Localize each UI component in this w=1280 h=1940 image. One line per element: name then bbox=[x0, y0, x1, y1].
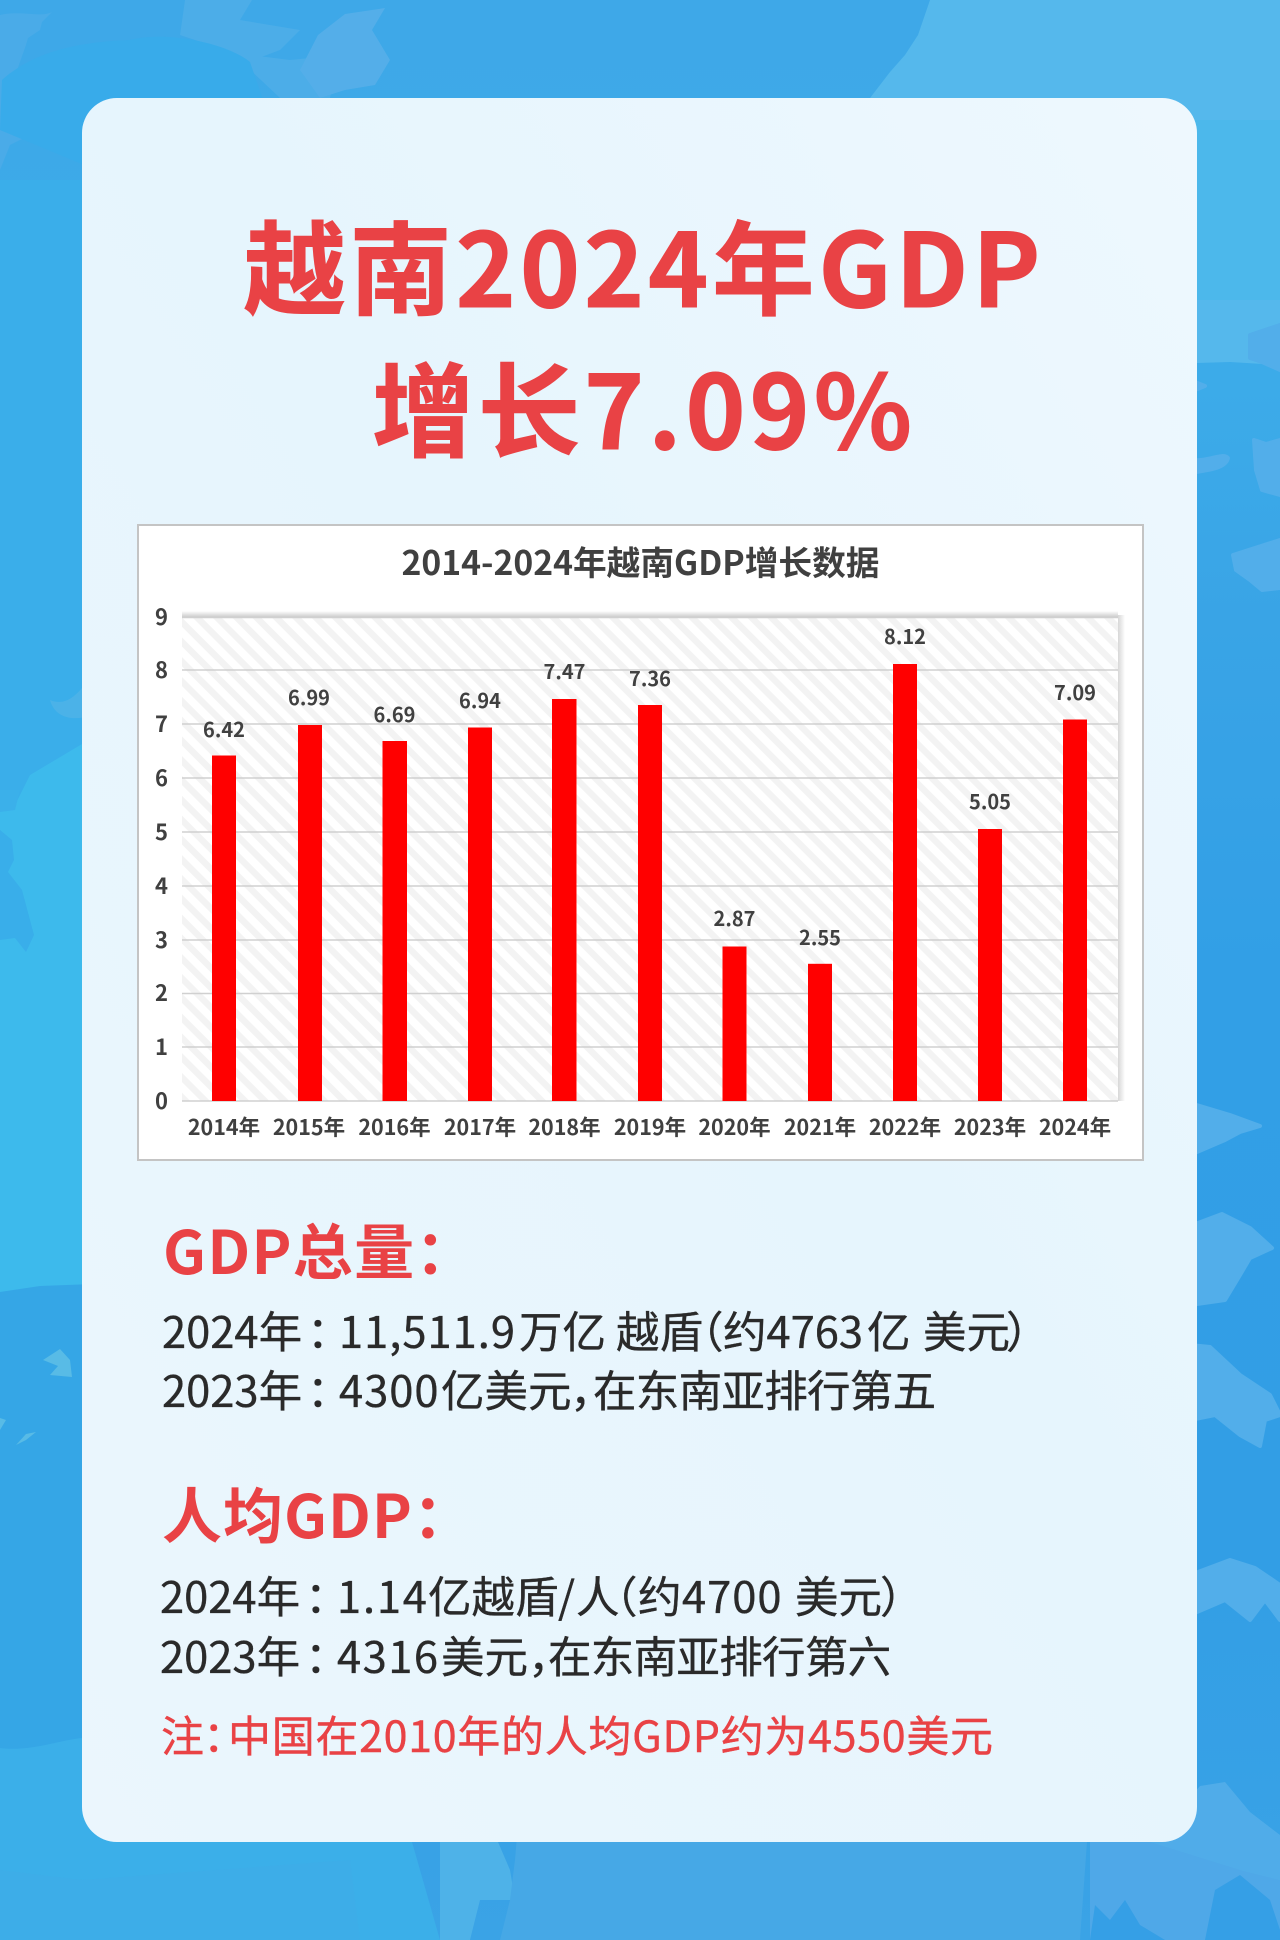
text block: GDP total: 美元 bbox=[923, 1298, 1010, 1361]
right column islands bbox=[1190, 325, 1280, 1620]
value labels bbox=[203, 621, 1096, 951]
title bbox=[244, 190, 1044, 479]
text block: GDP total: 2023年 bbox=[162, 1357, 302, 1420]
x axis labels bbox=[188, 1111, 1111, 1142]
bottom land bbox=[0, 1738, 440, 1940]
text block: GDP total: 11,511.9 bbox=[339, 1298, 516, 1361]
x axis labels: 2014年 bbox=[188, 1111, 260, 1142]
value labels: 6.94 bbox=[459, 685, 501, 714]
y axis labels: 4 bbox=[155, 869, 168, 901]
chart title: 2014-2024年越南GDP增长数据 bbox=[402, 536, 879, 585]
text block: GDP per capita: 人 bbox=[576, 1563, 620, 1626]
text block: GDP per capita: 在东南亚排行第六 bbox=[548, 1623, 890, 1686]
heading: GDP per capita: 人均GDP： bbox=[162, 1469, 474, 1556]
value labels: 6.69 bbox=[374, 699, 415, 728]
text block: GDP per capita: ： bbox=[305, 1623, 348, 1686]
title: 越南2024年GDP bbox=[244, 190, 1044, 337]
y axis labels: 7 bbox=[155, 707, 168, 739]
x axis labels: 2016年 bbox=[358, 1111, 431, 1142]
text block: GDP total: 亿美元 bbox=[441, 1357, 572, 1420]
text block: GDP total bbox=[162, 1298, 1050, 1420]
text block: GDP total: 4300 bbox=[339, 1357, 440, 1420]
text block: GDP total: ） bbox=[1006, 1298, 1050, 1361]
y axis labels: 8 bbox=[155, 653, 168, 685]
x axis labels: 2023年 bbox=[954, 1111, 1026, 1142]
x axis labels: 2021年 bbox=[784, 1111, 856, 1142]
value labels: 2.55 bbox=[799, 922, 841, 951]
panel: white card bbox=[82, 98, 1197, 1842]
text block: GDP total: ： bbox=[307, 1357, 350, 1420]
value labels: 5.05 bbox=[969, 786, 1011, 815]
text block: GDP per capita: / bbox=[558, 1563, 575, 1626]
chart: GDP growth bar chart 2014-2024 bbox=[138, 525, 1143, 1160]
y axis labels: 9 bbox=[155, 600, 168, 632]
note: 注 bbox=[161, 1703, 204, 1765]
text block: GDP total: 万亿 bbox=[519, 1298, 606, 1361]
plot area bbox=[182, 611, 1125, 1101]
title: 增长7.09% bbox=[372, 332, 916, 479]
value labels: 7.47 bbox=[544, 656, 585, 685]
value labels: 8.12 bbox=[884, 621, 926, 650]
y axis labels: 0 bbox=[155, 1084, 168, 1116]
text block: GDP total: 在东南亚排行第五 bbox=[593, 1357, 935, 1420]
text block: GDP total: 2024年 bbox=[162, 1298, 302, 1361]
heading: GDP total: GDP总量： bbox=[163, 1205, 477, 1292]
value labels: 6.42 bbox=[203, 714, 245, 743]
text block: GDP per capita: 约 bbox=[638, 1563, 682, 1626]
x axis labels: 2024年 bbox=[1039, 1111, 1111, 1142]
text block: GDP per capita: （ bbox=[594, 1563, 638, 1626]
note: ： bbox=[203, 1703, 246, 1765]
text block: GDP per capita: 4316 bbox=[337, 1623, 440, 1686]
text block: GDP per capita: 亿越盾 bbox=[428, 1563, 558, 1626]
x axis labels: 2017年 bbox=[444, 1111, 516, 1142]
value labels: 2.87 bbox=[714, 903, 755, 932]
y axis labels: 3 bbox=[155, 923, 168, 955]
text block: GDP per capita: 美元 bbox=[441, 1623, 528, 1686]
text block: GDP total: ： bbox=[307, 1298, 350, 1361]
text block: GDP per capita: 美元 bbox=[795, 1563, 882, 1626]
top right land bbox=[860, 0, 1280, 366]
text block: GDP per capita: 4700 bbox=[682, 1563, 783, 1626]
value labels: 7.09 bbox=[1054, 677, 1096, 706]
y axis labels bbox=[155, 600, 168, 1116]
text block: GDP total: 越盾 bbox=[616, 1298, 703, 1361]
text block: GDP total: （ bbox=[680, 1298, 724, 1361]
text block: GDP per capita: 2023年 bbox=[160, 1623, 300, 1686]
text block: GDP per capita bbox=[160, 1563, 924, 1686]
top left land bbox=[0, 12, 52, 100]
value labels: 7.36 bbox=[629, 663, 671, 692]
bars bbox=[212, 664, 1087, 1101]
x axis labels: 2015年 bbox=[273, 1111, 345, 1142]
x axis labels: 2018年 bbox=[528, 1111, 601, 1142]
text block: GDP total: 约4763 bbox=[723, 1298, 863, 1361]
text block: GDP per capita: ） bbox=[880, 1563, 924, 1626]
y axis labels: 2 bbox=[155, 976, 168, 1008]
y axis labels: 1 bbox=[155, 1030, 168, 1062]
text block: GDP total: 亿 bbox=[867, 1298, 910, 1361]
text block: GDP per capita: 1.14 bbox=[337, 1563, 429, 1626]
text block: GDP per capita: 2024年 bbox=[160, 1563, 300, 1626]
x axis labels: 2020年 bbox=[698, 1111, 771, 1142]
text block: GDP per capita: ： bbox=[305, 1563, 348, 1626]
y axis labels: 6 bbox=[155, 761, 168, 793]
value labels: 6.99 bbox=[288, 682, 330, 711]
note: 中国在2010年的人均GDP约为4550美元 bbox=[228, 1703, 994, 1765]
y axis labels: 5 bbox=[155, 815, 168, 847]
text block: GDP per capita: ， bbox=[528, 1623, 572, 1686]
x axis labels: 2019年 bbox=[614, 1111, 686, 1142]
left column lower land bbox=[0, 744, 120, 1292]
x axis labels: 2022年 bbox=[869, 1111, 941, 1142]
text block: GDP total: ， bbox=[570, 1357, 614, 1420]
